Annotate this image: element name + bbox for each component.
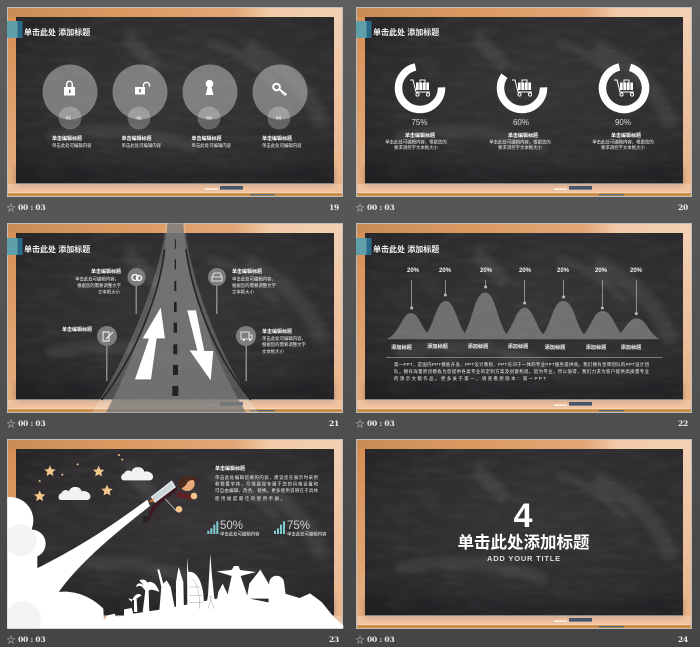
skyline silhouette — [98, 554, 343, 628]
donut 90% — [592, 61, 654, 151]
curve labels: 添加标题 — [468, 342, 489, 350]
percent labels: 20% — [595, 268, 608, 274]
item 01: 单击编辑标题 — [52, 135, 82, 142]
donut 75%: 75% — [411, 118, 428, 127]
up arrow — [135, 308, 165, 379]
footer 22: 00 : 03 — [367, 419, 394, 428]
donut 60%: 单击编辑标题 — [508, 132, 538, 139]
curve labels: 添加标题 — [391, 343, 413, 351]
item 04 — [252, 64, 308, 149]
footer 22: 22 — [678, 419, 688, 428]
item 01: 单击此处可编辑内容 — [52, 142, 92, 149]
footer 19 — [6, 203, 339, 213]
item 03: 单击编辑标题 — [192, 135, 222, 142]
item 04: 单击此处可编辑内容 — [262, 142, 302, 149]
donut 60%: 单击此处可编辑内容，根据您的 — [489, 138, 551, 146]
pin bottom right — [236, 326, 307, 381]
pin top left — [75, 268, 146, 314]
footer 19: ☆ — [6, 203, 16, 213]
pin top right: 单击编辑标题 — [232, 268, 262, 275]
slide title: 单击此处 添加标题 — [24, 27, 90, 37]
footer 23: 00 : 03 — [18, 635, 45, 644]
leader lines and dots — [410, 280, 638, 315]
item 04: 04 — [276, 116, 281, 120]
bars 75% — [274, 521, 285, 534]
pin bottom right: 根据您的需要调整文字 — [262, 341, 307, 348]
divider — [386, 357, 663, 359]
donut 60%: 要求调控字文本框大小 — [498, 144, 543, 151]
footer 19: 19 — [329, 203, 339, 212]
footer 24: 00 : 03 — [367, 635, 394, 644]
footer 23: 23 — [329, 635, 339, 644]
title tag — [7, 238, 22, 255]
item 03 — [182, 64, 238, 149]
section number: 4 — [514, 497, 533, 535]
burj al arab — [187, 557, 204, 610]
footer 21: 21 — [329, 419, 339, 428]
curve labels: 添加标题 — [621, 343, 642, 351]
donut 60% — [489, 66, 551, 151]
text block: 使用幅度最佳的使用手册。 — [215, 495, 285, 502]
pin bottom right: 单击编辑标题 — [262, 328, 292, 335]
footer 24: ☆ — [356, 635, 365, 645]
item 02: 单击此处可编辑内容 — [122, 142, 162, 149]
pin top left: 单击此处可编辑内容， — [75, 276, 119, 282]
footer 20 — [356, 203, 688, 213]
title tag — [356, 21, 372, 38]
donut 75%: 要求调控字文本框大小 — [394, 144, 439, 151]
footer 20: 20 — [678, 203, 688, 212]
pin top left: 根据您的需要调整文字 — [77, 282, 122, 289]
pin top right: 单击此处可编辑内容， — [232, 276, 276, 282]
footer 22: ☆ — [356, 419, 365, 429]
pyramid and dome — [247, 570, 272, 599]
stat 50%: 单击此处可编辑内容 — [220, 530, 260, 538]
pin bottom left: 单击编辑标题 — [62, 326, 92, 333]
item 02: 02 — [136, 116, 142, 120]
pin top right: 文本框大小 — [232, 288, 255, 296]
bell curves — [386, 280, 663, 358]
down arrow — [187, 310, 213, 380]
stat 50% — [220, 520, 260, 538]
percent labels: 20% — [557, 268, 570, 274]
donut 75%: 单击此处可编辑内容，根据您的 — [385, 138, 447, 146]
palms — [136, 580, 159, 612]
body paragraph: 队，拥有海量原创模板为您提供各类专业的定制方案及创意构思。因为专业，所以值得，我们力求为客户提供高质量专业 — [394, 368, 650, 375]
donut 75%: 单击编辑标题 — [405, 132, 435, 139]
section subtitle: ADD YOUR TITLE — [487, 554, 561, 563]
stat 75%: 75% — [287, 520, 310, 532]
percent labels: 20% — [519, 268, 532, 274]
slide 24: section title — [356, 439, 692, 645]
footer 24: 24 — [678, 635, 688, 644]
percent labels — [407, 268, 643, 274]
section heading: 单击此处添加标题 — [458, 533, 590, 552]
body paragraph: 的演示文稿作品。更多关于第一，请查看原版本：第一PPT — [394, 375, 546, 382]
footer 21: 00 : 03 — [18, 419, 45, 428]
slide title: 单击此处 添加标题 — [24, 244, 90, 254]
pin bottom right: 文本框大小 — [262, 348, 285, 355]
smoke cloud and trail — [7, 497, 150, 628]
donut 75% — [385, 66, 447, 151]
curve labels — [391, 342, 642, 351]
item 01 — [42, 64, 98, 149]
pin bottom left — [62, 326, 117, 381]
slide 20: three donut charts — [356, 7, 692, 213]
item 03: 03 — [206, 116, 212, 120]
percent labels: 20% — [630, 268, 643, 274]
statue of liberty — [157, 569, 175, 610]
text block: 和微量字体，尽情展现专属于您的风格设置和 — [215, 480, 318, 488]
text block: 可自由编辑、改色、替换。更多使用说明在于具体 — [215, 487, 319, 494]
pin top right — [208, 268, 277, 314]
donut 90%: 90% — [615, 118, 631, 127]
slide 23: rocket man illustration — [0, 439, 343, 645]
footer 21: ☆ — [6, 419, 16, 429]
clouds — [59, 467, 153, 500]
eiffel tower — [205, 554, 217, 610]
footer 24 — [356, 635, 688, 645]
donut 90%: 要求调控字文本框大小 — [601, 144, 646, 151]
text block: 单击此处编辑您要的内容，建议您在展示时采用 — [215, 474, 318, 481]
item 02: 单击编辑标题 — [122, 135, 152, 142]
slide title: 单击此处 添加标题 — [373, 244, 439, 254]
center dashes — [172, 239, 178, 396]
percent labels: 20% — [439, 268, 452, 274]
slide 22: bell curve chart — [356, 223, 692, 429]
slide 21: road diagram — [6, 223, 343, 429]
stars — [34, 454, 123, 501]
curve labels: 添加标题 — [545, 343, 566, 351]
rocket man — [143, 475, 198, 523]
title tag — [356, 238, 372, 255]
text block: 单击编辑标题 — [215, 465, 245, 472]
percent labels: 20% — [480, 268, 493, 274]
text block — [215, 465, 319, 502]
pin bottom right: 单击此处可编辑内容， — [262, 335, 306, 342]
footer 20: ☆ — [356, 203, 365, 213]
curve labels: 添加标题 — [586, 343, 607, 351]
curve labels: 添加标题 — [427, 342, 449, 350]
donut 90%: 单击编辑标题 — [611, 132, 641, 139]
percent labels: 20% — [407, 268, 420, 274]
footer 20: 00 : 03 — [367, 203, 394, 212]
footer 23 — [6, 635, 339, 645]
footer 21 — [6, 419, 339, 429]
footer 19: 00 : 03 — [18, 203, 45, 212]
donut 60%: 60% — [513, 118, 529, 127]
stat 75%: 单击此处可编辑内容 — [287, 530, 327, 538]
illustration — [0, 454, 343, 636]
christ statue — [217, 566, 256, 599]
pin top left: 文本框大小 — [98, 288, 121, 296]
donut 90%: 单击此处可编辑内容，根据您的 — [592, 138, 654, 146]
slide title: 单击此处 添加标题 — [373, 27, 439, 37]
pin top left: 单击编辑标题 — [91, 268, 121, 275]
spire building — [176, 567, 184, 610]
stat 75% — [287, 520, 327, 538]
item 01: 01 — [66, 116, 71, 120]
curve labels: 添加标题 — [508, 342, 529, 350]
title tag — [7, 21, 22, 38]
item 03: 单击此处可编辑内容 — [192, 142, 232, 149]
bars 50% — [207, 521, 218, 534]
pin top right: 根据您的需要调整文字 — [232, 282, 277, 289]
body paragraph: 第一PPT，是国内PPT模板开发、PPT设计教程、PPT培训于一体的专业PPT服务提供商。我们拥有金牌团队的PPT设计团 — [394, 361, 650, 368]
item 04: 单击编辑标题 — [262, 135, 292, 142]
item 02 — [112, 64, 168, 149]
slide 19: four lock icons — [6, 7, 343, 213]
footer 23: ☆ — [6, 635, 16, 645]
footer 22 — [356, 419, 688, 429]
body paragraph — [394, 361, 650, 382]
stat 50%: 50% — [220, 520, 243, 532]
road — [92, 223, 258, 412]
